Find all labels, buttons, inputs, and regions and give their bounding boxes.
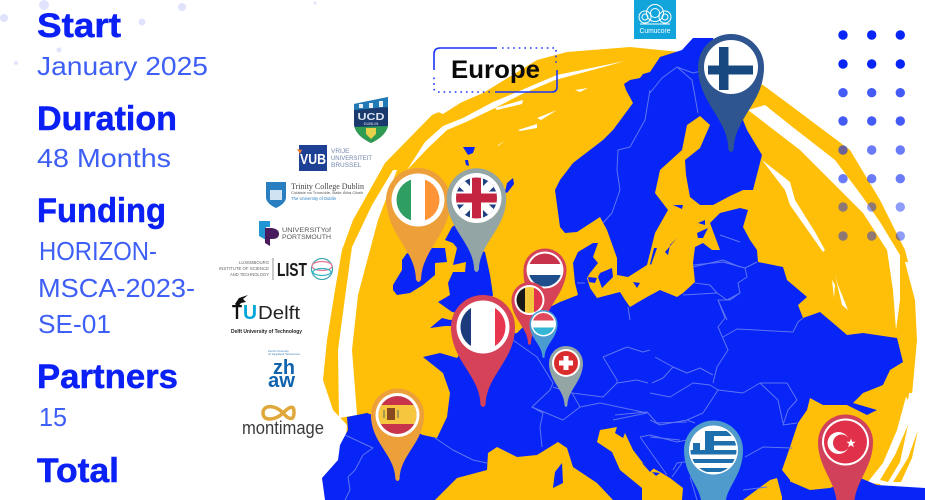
logo: ZHAW [268,349,301,392]
pin: Switzerland [549,346,583,407]
island: Corsica and Adriatic coast [553,463,563,488]
logo: LIST: INSTITUTE OF SCIENCE [219,266,269,271]
logo: TU Delft: U [243,302,257,324]
logo: UCD Dublin: UCD [358,111,385,123]
pin: Belgium [512,282,548,345]
text: funding programme: HORIZON- [39,236,157,266]
logo: ZHAW: of Applied Sciences [268,352,301,356]
logo: LIST: LIST [277,260,307,280]
logo: Cumucore [634,0,676,39]
logo: UCD Dublin: DUBLIN [364,121,378,126]
text: duration value: 48 Months [37,143,171,173]
label: Europe [434,48,557,92]
pin: Ireland [386,168,450,282]
logo: VUB: BRUSSEL [331,162,362,169]
country borders [345,67,803,500]
pin: Greece [684,420,743,500]
logo: TU Delft: T [232,302,242,324]
land: Baltic islands [588,205,708,288]
logo: VUB: UNIVERSITEIT [331,155,372,162]
logo: VUB: VRIJE [331,148,350,155]
pin: Netherlands [524,248,566,312]
logo: VUB [297,145,372,171]
decorative dot grid [838,30,905,241]
logo: LIST: AND TECHNOLOGY [230,272,269,277]
yellow brush globe [323,47,925,500]
logo: TU Delft: Delft [258,303,300,323]
heading: start: Start [37,7,121,45]
logo: Cumucore: Cumucore [640,28,671,35]
logo: montimage [242,407,324,438]
logo: University of Portsmouth: PORTSMOUTH [282,234,331,241]
panel: project facts [37,7,208,490]
logo: UCD Dublin [354,97,388,143]
pin: Luxembourg [530,310,558,358]
logo: LIST: LUXEMBOURG [239,260,269,265]
logo: TU Delft [231,295,302,335]
map of Europe [322,38,925,500]
logo: ZHAW: aw [268,370,295,392]
logo: Trinity College Dublin [266,182,364,208]
land: Turkey [782,477,925,500]
pin: Turkey [818,414,873,500]
heading: total: Total [37,452,119,490]
logo: University of Portsmouth [259,221,331,246]
logo: LIST [219,258,332,280]
text: partners count: 15 [39,402,67,432]
logo: ZHAW: zh [273,357,295,379]
seas: Mediterranean and Adriatic [435,427,782,500]
label: Europe: Europe [451,56,540,84]
text: start date: January 2025 [37,51,208,81]
logo: Trinity College Dublin: The University of Dublin [291,196,336,201]
pin: Finland [698,34,764,152]
pin: Spain [371,388,424,481]
pin: United Kingdom [447,168,506,272]
land: British Isles [393,147,514,328]
pin: France [451,295,515,407]
text: funding programme: MSCA-2023- [38,273,195,303]
logo: Trinity College Dublin: Trinity College Dublin [291,182,364,191]
heading: duration: Duration [37,100,177,138]
text: funding programme: SE-01 [38,309,111,339]
heading: funding: Funding [37,192,166,230]
land: Scandinavia [555,38,762,277]
text: funding programme [38,236,195,339]
logo: VUB: VUB [300,151,326,168]
logo: University of Portsmouth: UNIVERSITYof [282,227,331,234]
land: continental Europe [322,208,903,500]
logo: TU Delft: Delft University of Technology [231,329,302,335]
logo: ZHAW: Zurich University [268,349,289,353]
logo: Trinity College Dublin: Coláiste na Tríonóide, Baile Átha Cliath [291,190,363,195]
heading: partners: Partners [37,358,178,396]
logo: montimage: montimage [242,418,324,438]
